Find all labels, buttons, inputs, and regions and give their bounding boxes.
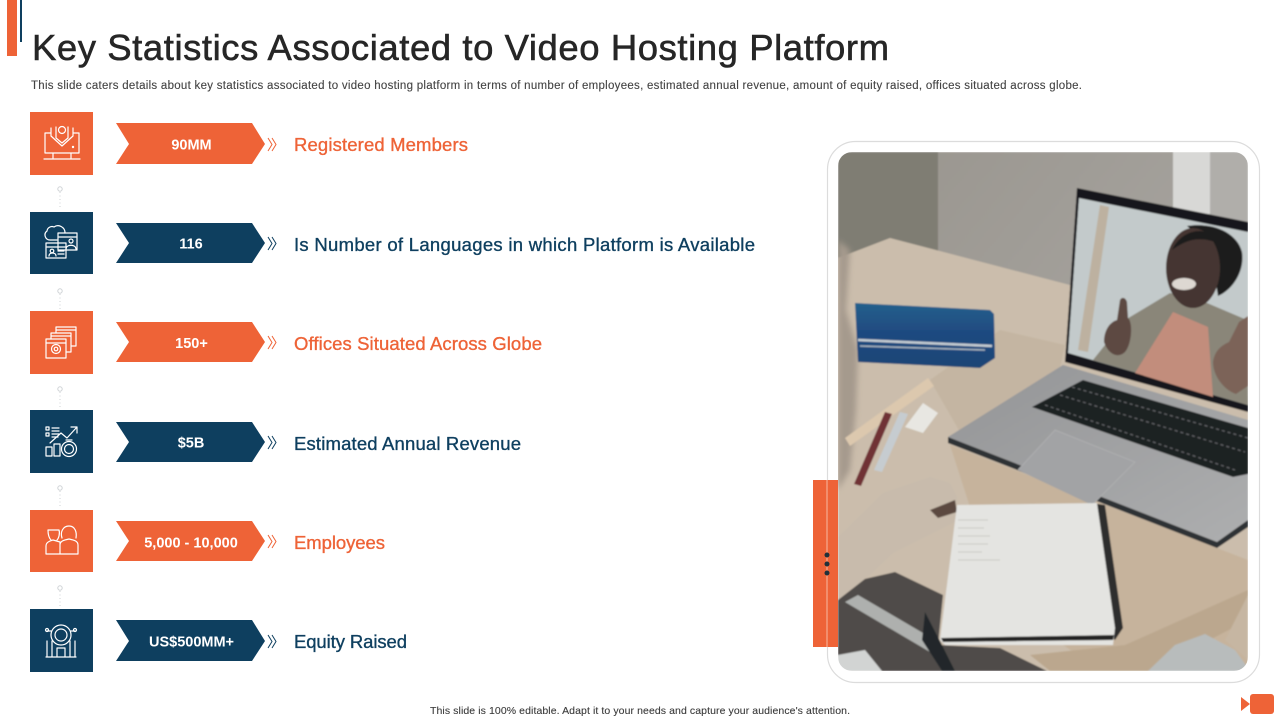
stat row: registered members — [30, 112, 468, 175]
laptop screen — [1065, 188, 1248, 412]
badge — [116, 223, 265, 263]
badge: 5,000 - 10,000 — [144, 536, 238, 552]
label: Offices Situated Across Globe — [294, 333, 542, 354]
label: Registered Members — [294, 134, 468, 155]
icon: cloud with profiles — [30, 212, 93, 274]
icon: video camera — [1241, 694, 1274, 714]
badge: $5B — [178, 436, 204, 452]
badge: 150+ — [175, 336, 208, 352]
accent bars — [7, 0, 22, 56]
chevrons — [268, 237, 276, 250]
badge — [116, 422, 265, 462]
subtitle: This slide caters details about key statistics associated to video hosting platform in terms of number of employees, estimated annual revenue, amount of equity raised, offices situated across globe. — [31, 80, 1082, 92]
orange side tab — [813, 480, 838, 647]
label: Equity Raised — [294, 631, 407, 652]
connector — [58, 586, 62, 607]
badge: 116 — [179, 236, 203, 252]
dark floor — [838, 572, 1047, 671]
stat row: languages — [30, 212, 755, 274]
icon: stacked windows with gear — [30, 311, 93, 374]
hand — [840, 578, 865, 600]
label: Estimated Annual Revenue — [294, 433, 521, 454]
arm at right — [1231, 596, 1248, 628]
icon: growth chart, coins and stopwatch — [30, 410, 93, 473]
laptop base — [948, 365, 1248, 548]
title: Key Statistics Associated to Video Hosting Platform — [32, 27, 889, 68]
label: Is Number of Languages in which Platform is Available — [294, 234, 755, 255]
icon: two people — [30, 510, 93, 572]
badge — [116, 322, 265, 362]
icon: coin over building — [30, 609, 93, 672]
stat row: revenue — [30, 410, 521, 473]
stat row: equity — [30, 609, 407, 672]
badge — [116, 123, 265, 164]
chevrons — [268, 436, 276, 449]
badge: US$500MM+ — [149, 634, 234, 650]
photo frame — [828, 142, 1260, 682]
pencils and eraser — [845, 378, 938, 486]
sleeve — [838, 634, 1248, 671]
badge: 90MM — [171, 138, 212, 154]
badge — [116, 521, 265, 561]
chevrons — [268, 336, 276, 349]
photo: video call on a laptop — [838, 152, 1248, 671]
badge — [116, 620, 265, 661]
connector — [58, 486, 62, 508]
label: Employees — [294, 532, 385, 553]
stat row: employees — [30, 510, 385, 572]
stat row: offices — [30, 311, 542, 374]
chevrons — [268, 138, 276, 151]
wall — [838, 152, 1248, 286]
connector — [58, 387, 62, 408]
chevrons — [268, 535, 276, 548]
woman on screen — [1093, 225, 1248, 405]
pencil case — [855, 303, 995, 368]
blurred head in foreground — [838, 240, 858, 490]
notebook — [940, 503, 1123, 645]
connector — [58, 187, 62, 209]
table — [838, 238, 1248, 671]
chevrons — [268, 635, 276, 648]
icon: laptop with user — [30, 112, 93, 175]
connector — [58, 289, 62, 309]
footer note: This slide is 100% editable. Adapt it to your needs and capture your audience's attention. — [430, 705, 850, 717]
